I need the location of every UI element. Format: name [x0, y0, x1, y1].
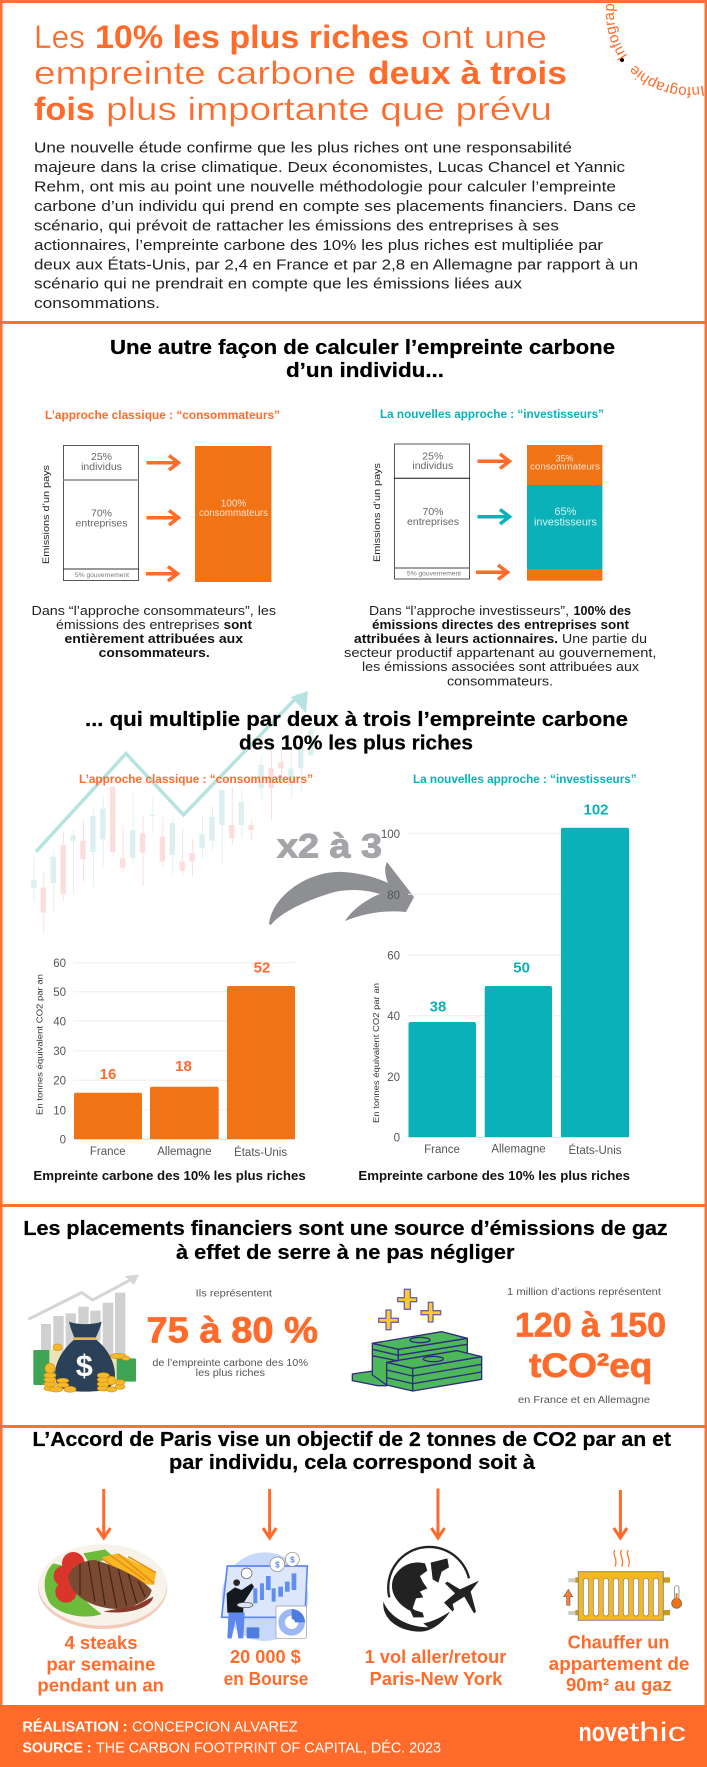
panel: placements financiers	[23, 1217, 668, 1406]
caption: approche investisseurs: consommateurs.	[447, 674, 553, 689]
credits: RÉALISATION :	[22, 1719, 128, 1736]
heading: une autre façon: d’un individu...	[286, 359, 444, 382]
bar values: 38	[430, 999, 446, 1016]
bar values	[430, 802, 609, 1016]
icon: stacks of banknotes	[352, 1289, 482, 1391]
stacked bar: 35% / 65%: consommateurs	[530, 462, 601, 472]
bar chart: approche consommateurs	[33, 958, 306, 1183]
credits: THE CARBON FOOTPRINT OF CAPITAL, DÉC. 2023	[96, 1740, 441, 1757]
stat: 75 à 80 %: de l’empreinte carbone des 10%	[152, 1358, 308, 1369]
bars	[74, 986, 295, 1139]
caption: approche investisseurs: les émissions associées sont attribuées aux	[362, 659, 640, 674]
title: plus importante que prévu	[106, 91, 552, 127]
arrows	[146, 456, 178, 581]
x labels: États-Unis	[234, 1146, 287, 1159]
stacked box: emissions: individus	[81, 461, 122, 473]
y axis ticks: 80	[387, 890, 400, 902]
heading: multiplie par deux à trois	[85, 708, 628, 754]
caption: approche investisseurs: 100% des	[574, 603, 631, 618]
intro text: consommations.	[34, 296, 160, 312]
x labels	[424, 1144, 622, 1157]
credits: CONCEPCION ALVAREZ	[132, 1720, 298, 1736]
caption: approche consommateurs	[32, 603, 277, 660]
x labels: France	[424, 1144, 460, 1156]
subheading: approche investisseurs: La nouvelles approche : “investisseurs”	[413, 774, 637, 786]
title: deux à trois	[368, 55, 567, 91]
intro text: Une nouvelle étude confirme que les plus riches ont une responsabilité	[34, 141, 572, 157]
stacked bar: 35% / 65%	[527, 445, 602, 581]
caption: approche investisseurs: secteur productif appartenant au gouvernement,	[344, 645, 656, 660]
intro text: scénario qui ne prendrait en compte que les émissions liées aux	[34, 277, 523, 293]
intro text: deux aux États-Unis, par 2,4 en France et par 2,8 en Allemagne par rapport à un	[34, 256, 638, 273]
intro text: majeure dans la crise climatique. Deux économistes, Lucas Chancel et Yannic	[34, 160, 625, 176]
bar values: 102	[583, 802, 609, 819]
label: vol Paris-New York: Paris-New York	[370, 1669, 503, 1689]
bar values: 52	[254, 960, 270, 977]
icon: globe and airplane	[383, 1547, 479, 1632]
x labels: France	[90, 1146, 126, 1158]
intro text: actionnaires, l’empreinte carbone des 10% les plus riches est multipliée par	[34, 238, 603, 254]
y axis ticks: 50	[53, 987, 66, 999]
heading: une autre façon: Une autre façon de calculer l’empreinte carbone	[110, 336, 615, 359]
icon: investor with stock chart: $	[275, 1560, 280, 1569]
label: vol Paris-New York	[365, 1647, 506, 1689]
bar values: 16	[100, 1066, 116, 1083]
logo: novethic	[578, 1717, 686, 1747]
heading: placements financiers: à effet de serre à ne pas négliger	[176, 1241, 515, 1264]
caption: approche investisseurs: Dans “l’approche investisseurs”,	[369, 603, 569, 618]
x labels: États-Unis	[568, 1144, 622, 1157]
title	[34, 19, 567, 127]
y axis ticks: 60	[53, 958, 66, 970]
chart caption: Empreinte carbone des 10% les plus riches	[358, 1168, 630, 1183]
bar: 100% consommateurs	[195, 446, 271, 582]
arrows: down	[97, 1488, 627, 1538]
icon: money bag with growth chart	[28, 1275, 139, 1392]
stat: 120 à 150 tCO²eq: tCO²eq	[529, 1347, 652, 1385]
heading: multiplie par deux à trois: des 10% les plus riches	[239, 731, 473, 754]
icon: radiator	[564, 1550, 682, 1620]
label: 4 steaks: pendant un an	[37, 1676, 164, 1696]
y axis ticks: 40	[53, 1016, 66, 1028]
subheading: approche consommateurs: L’approche classique : “consommateurs”	[79, 774, 313, 786]
logo: novethic: nove	[578, 1717, 629, 1747]
x labels: Allemagne	[157, 1146, 212, 1158]
stacked box: emissions: individus	[412, 460, 453, 472]
stacked box: emissions: entreprises	[76, 518, 127, 530]
circular label: infographie: Infographie	[630, 66, 704, 98]
y axis ticks: 60	[387, 950, 400, 962]
label: vol Paris-New York: 1 vol aller/retour	[365, 1647, 506, 1667]
logo: novethic: thic	[629, 1717, 686, 1747]
heading: accord de Paris	[32, 1428, 671, 1474]
intro text: carbone d’un individu qui prend en compte ses placements financiers. Dans ce	[34, 199, 636, 215]
stat: 120 à 150 tCO²eq	[507, 1287, 666, 1406]
icon: money bag with growth chart: $	[76, 1349, 93, 1383]
y axis ticks	[53, 958, 66, 1146]
x labels: Allemagne	[491, 1144, 546, 1156]
y axis ticks: 10	[53, 1106, 66, 1118]
axis label: Emissions d’un pays	[372, 463, 383, 562]
title: empreinte carbone	[34, 55, 356, 91]
caption: approche consommateurs: émissions des entreprises	[56, 617, 220, 632]
label: chauffer un appartement	[549, 1632, 689, 1695]
label: 20 000 $ en Bourse: en Bourse	[224, 1669, 308, 1689]
label: chauffer un appartement: 90m² au gaz	[566, 1675, 672, 1695]
title: 10% les plus riches	[95, 19, 409, 55]
label: 20 000 $ en Bourse: 20 000 $	[230, 1647, 301, 1667]
stacked box: emissions: 5% gouvernement	[407, 571, 461, 577]
panel: accord de Paris	[32, 1428, 689, 1696]
arrows	[476, 454, 510, 580]
title: ont une	[421, 19, 547, 55]
y axis ticks: 20	[387, 1072, 400, 1084]
bar values	[100, 960, 270, 1083]
title: Les	[34, 19, 85, 55]
stacked box: emissions: entreprises	[407, 516, 459, 528]
bar chart: approche investisseurs	[358, 802, 630, 1183]
stat: 75 à 80 %: les plus riches	[196, 1368, 265, 1379]
intro text: Rehm, ont mis au point une nouvelle méthodologie pour calculer l’empreinte	[34, 179, 616, 195]
y axis title: En tonnes équivalent CO2 par an	[372, 983, 381, 1123]
caption: approche investisseurs: Une partie du	[562, 631, 647, 646]
background illustration: stock chart	[31, 691, 313, 933]
heading: placements financiers	[23, 1217, 668, 1264]
stat: 120 à 150 tCO²eq: en France et en Allemagne	[518, 1395, 650, 1406]
y axis ticks: 100	[381, 829, 400, 841]
heading: une autre façon	[110, 336, 615, 382]
stacked bar: 35% / 65%: 35%	[555, 454, 574, 464]
y axis ticks: 40	[387, 1011, 400, 1023]
title: fois	[34, 91, 95, 127]
subheading: approche investisseurs: La nouvelles approche : “investisseurs”	[380, 409, 604, 421]
chart caption: Empreinte carbone des 10% les plus riches	[33, 1168, 306, 1183]
bar: 100% consommateurs: consommateurs	[199, 508, 268, 519]
bar values: 18	[175, 1058, 192, 1075]
stat: 75 à 80 %	[146, 1289, 318, 1379]
label: 4 steaks: 4 steaks	[64, 1633, 138, 1653]
circular label: infographie	[606, 4, 704, 98]
y axis ticks: 20	[53, 1076, 66, 1088]
stacked box: emissions: 70%	[422, 506, 444, 518]
caption: approche investisseurs: émissions directes des entreprises sont	[372, 617, 630, 632]
bar: 100% consommateurs: 100%	[221, 499, 246, 510]
stacked box: emissions: 5% gouvernement	[75, 573, 129, 579]
stat: 120 à 150 tCO²eq: 1 million d’actions représentent	[507, 1287, 661, 1298]
stat: 75 à 80 %: Ils représentent	[196, 1289, 272, 1300]
y axis title: En tonnes équivalent CO2 par an	[36, 974, 44, 1115]
caption: approche investisseurs: attribuées à leurs actionnaires.	[354, 631, 558, 646]
axis label: Emissions d’un pays	[41, 465, 52, 564]
heading: accord de Paris: par individu, cela correspond soit à	[169, 1451, 536, 1474]
heading: multiplie par deux à trois: ... qui multiplie par deux à trois l’empreinte carbone	[85, 708, 628, 731]
stacked box: emissions: 25%	[91, 451, 112, 463]
icon: investor with stock chart: $	[290, 1555, 295, 1564]
x labels	[90, 1146, 287, 1159]
caption: approche consommateurs: Dans “l’approche consommateurs”, les	[32, 603, 277, 618]
bars	[408, 828, 629, 1137]
stacked box: emissions: 70%	[91, 508, 112, 520]
caption: approche consommateurs: consommateurs.	[99, 645, 210, 660]
stacked box: emissions: 25%	[422, 450, 443, 462]
heading: accord de Paris: L’Accord de Paris vise un objectif de 2 tonnes de CO2 par an et	[32, 1428, 671, 1451]
caption: approche consommateurs: entièrement attribuées aux	[64, 631, 244, 646]
label: 4 steaks: par semaine	[46, 1655, 155, 1675]
label: 20 000 $ en Bourse	[224, 1647, 308, 1689]
intro text: scénario, qui prévoit de rattacher les émissions des entreprises à ses	[34, 218, 559, 234]
stacked box: emissions	[63, 446, 139, 580]
stacked box: emissions	[394, 444, 470, 579]
panel: méthodes de calcul	[32, 336, 656, 689]
multiplier: x2 à 3 with curved arrow: x2 à 3	[277, 828, 382, 866]
stacked bar: 35% / 65%: 65%	[554, 506, 577, 518]
label: chauffer un appartement: appartement de	[549, 1654, 689, 1674]
multiplier: x2 à 3 with curved arrow	[269, 828, 414, 925]
stat: 75 à 80 %: 75 à 80 %	[146, 1310, 318, 1351]
heading: placements financiers: Les placements financiers sont une source d’émissions de gaz	[23, 1217, 668, 1240]
label: chauffer un appartement: Chauffer un	[568, 1632, 670, 1652]
caption: approche investisseurs	[344, 603, 656, 689]
icon: investor with stock chart	[222, 1552, 308, 1641]
panel: multiplication de l'empreinte	[31, 691, 637, 1183]
credits: SOURCE :	[22, 1741, 92, 1757]
panel: introduction	[34, 4, 704, 312]
subheading: approche consommateurs: L’approche classique : “consommateurs”	[45, 410, 280, 422]
y axis ticks: 0	[394, 1132, 400, 1144]
stat: 120 à 150 tCO²eq: 120 à 150	[515, 1307, 666, 1345]
icon: steak plate	[38, 1544, 167, 1629]
label: 4 steaks	[37, 1633, 164, 1696]
intro text	[34, 141, 638, 312]
diagram: approche consommateurs	[41, 446, 271, 582]
caption: approche consommateurs: sont	[224, 617, 253, 632]
bar values: 50	[513, 960, 530, 977]
diagram: approche investisseurs	[372, 444, 602, 581]
y axis ticks: 0	[60, 1134, 66, 1146]
credits	[22, 1719, 441, 1757]
footer	[0, 1705, 707, 1767]
y axis ticks: 30	[53, 1046, 66, 1058]
y axis ticks	[381, 829, 400, 1144]
stacked bar: 35% / 65%: investisseurs	[534, 517, 597, 529]
